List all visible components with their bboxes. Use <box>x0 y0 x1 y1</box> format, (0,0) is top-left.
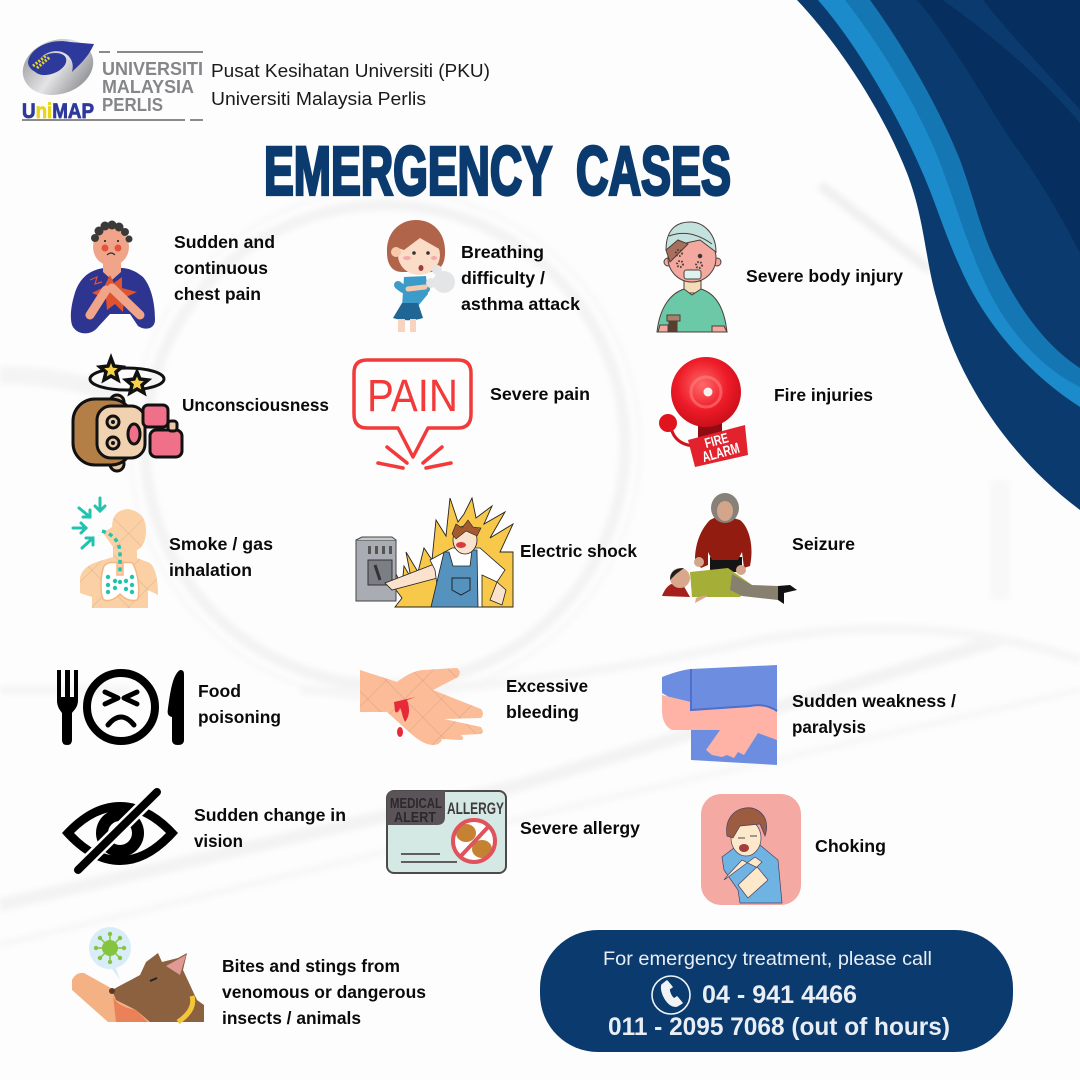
label <box>792 691 956 737</box>
icon: PAIN speech bubble: PAIN <box>367 370 458 421</box>
label: Seizure <box>792 534 855 554</box>
label: Severe pain <box>490 384 590 404</box>
label: Severe allergy <box>520 818 640 838</box>
item: unconsciousness <box>73 358 329 471</box>
label <box>506 676 588 722</box>
icon: PAIN speech bubble <box>354 360 471 468</box>
icon: medical alert allergy card <box>387 791 506 873</box>
item: seizure <box>662 493 855 604</box>
label: vision <box>194 831 243 851</box>
label <box>461 242 580 314</box>
UniMAP logo: PERLIS <box>102 95 163 115</box>
label: chest pain <box>174 284 261 304</box>
label: Sudden weakness / <box>792 691 956 711</box>
label: Electric shock <box>520 541 637 561</box>
icon: limp arm and hand <box>662 665 777 765</box>
UniMAP logo: UNIVERSITI <box>102 59 203 79</box>
label: bleeding <box>506 702 579 722</box>
label: paralysis <box>792 717 866 737</box>
icon: girl short of breath <box>387 220 455 332</box>
UniMAP logo <box>15 30 203 123</box>
item: electric shock <box>356 498 637 607</box>
label <box>174 232 275 304</box>
label: Fire injuries <box>774 385 873 405</box>
callout: emergency contact: 04 - 941 4466 <box>702 981 857 1009</box>
header text: institution name <box>211 60 490 109</box>
label <box>194 805 346 851</box>
icon: man with chest pain <box>71 220 155 333</box>
icon: dog biting arm with virus bubble <box>72 927 204 1022</box>
item: food poisoning <box>57 670 281 745</box>
label: Unconsciousness <box>182 395 329 415</box>
item: sudden weakness / paralysis <box>662 665 956 765</box>
icon: helper beside person on the floor <box>662 493 797 604</box>
item: breathing difficulty <box>387 220 580 332</box>
item: severe allergy <box>387 791 640 873</box>
header text: institution name: Pusat Kesihatan Universiti (PKU) <box>211 60 490 81</box>
item: choking <box>701 794 886 905</box>
icon: fire alarm bell: FIRE <box>703 429 730 451</box>
title: EMERGENCY <box>264 132 552 210</box>
label: Choking <box>815 836 886 856</box>
label: asthma attack <box>461 294 580 314</box>
label: difficulty / <box>461 268 545 288</box>
label: insects / animals <box>222 1008 361 1028</box>
icon: fire alarm bell <box>659 357 748 467</box>
decorative blue waves top right <box>797 0 1080 510</box>
title: CASES <box>576 132 731 210</box>
item: severe pain <box>354 360 590 468</box>
label: Bites and stings from <box>222 956 400 976</box>
item: chest pain <box>71 220 275 333</box>
label: poisoning <box>198 707 281 727</box>
icon: bleeding hand <box>360 668 483 745</box>
UniMAP logo: UniMAP <box>22 100 94 123</box>
icon: bandaged man <box>657 222 727 332</box>
icon: crossed-out eye <box>62 792 178 870</box>
icon: phone <box>652 976 690 1014</box>
label: Food <box>198 681 241 701</box>
icon: man electrocuted at switchboard <box>356 498 513 607</box>
icon: person choking <box>701 794 801 905</box>
label: continuous <box>174 258 268 278</box>
item: bites and stings <box>72 927 426 1028</box>
callout: emergency contact: 011 - 2095 7068 (out of hours) <box>608 1013 950 1041</box>
header text: institution name: Universiti Malaysia Perlis <box>211 88 426 109</box>
icon: medical alert allergy card: ALLERGY <box>447 799 504 818</box>
callout: emergency contact <box>540 930 1013 1052</box>
icon: lungs with inhaled particles <box>73 498 158 608</box>
label: inhalation <box>169 560 252 580</box>
label: Excessive <box>506 676 588 696</box>
label: Sudden change in <box>194 805 346 825</box>
icon: dizzy person lying down <box>73 358 182 471</box>
label: Breathing <box>461 242 544 262</box>
icon: fire alarm bell: ALARM <box>700 440 741 466</box>
UniMAP logo: MALAYSIA <box>102 77 194 97</box>
label: Smoke / gas <box>169 534 273 554</box>
icon: sick face plate with cutlery <box>57 670 184 745</box>
label <box>169 534 273 580</box>
label: Severe body injury <box>746 266 903 286</box>
item: sudden change in vision <box>62 792 346 870</box>
icon: medical alert allergy card: ALERT <box>394 809 436 826</box>
item: excessive bleeding <box>360 668 588 745</box>
item: smoke / gas inhalation <box>73 498 273 608</box>
item: severe body injury <box>657 222 903 332</box>
item: fire injuries <box>659 357 873 467</box>
label: venomous or dangerous <box>222 982 426 1002</box>
icon: medical alert allergy card: MEDICAL <box>390 795 442 812</box>
label <box>222 956 426 1028</box>
label <box>198 681 281 727</box>
callout: emergency contact: For emergency treatment, please call <box>603 948 932 970</box>
label: Sudden and <box>174 232 275 252</box>
